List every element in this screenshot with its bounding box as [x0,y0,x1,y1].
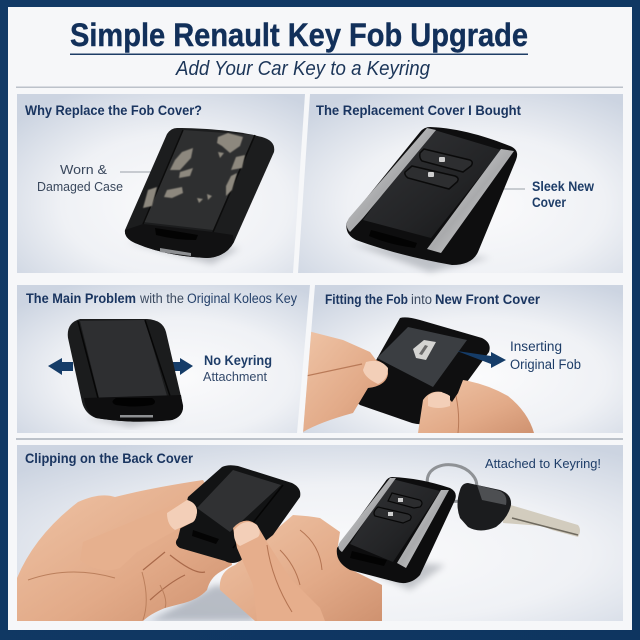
header rule [16,86,623,88]
panel: main problem [17,285,310,433]
icon: right thumb [233,521,325,621]
label: worn and damaged [37,162,123,194]
section rule [16,438,623,440]
heading: why replace: Why Replace the Fob Cover? [25,103,202,118]
label: no keyring: Attachment [203,370,268,384]
button: unlock [405,166,458,189]
icon: left thumb [180,500,197,528]
icon: open cover with fob [355,317,490,424]
label: inserting original fob: Original Fob [510,357,581,372]
icon: original fob [68,319,183,427]
arrow: inserting [457,351,506,368]
label: worn and damaged: Damaged Case [37,179,123,194]
heading: main problem: Original Koleos Key [187,291,297,306]
icon: key ring [424,460,480,506]
icon: car key [458,483,580,537]
title underline [70,54,528,55]
panel: clipping and keyring [17,445,623,621]
shadow under hands [150,585,255,621]
icon: new fob on keyring [337,477,456,590]
icon: worn fob [125,128,274,264]
thumb nail [167,500,197,530]
label: sleek new cover: Sleek New [532,179,594,194]
icon: new fob [346,127,517,272]
heading: fitting the fob [325,292,541,307]
panel: fitting the fob [303,285,623,433]
heading: main problem [26,291,297,306]
label: inserting original fob: Inserting [510,339,562,354]
icon: right hand [418,380,534,433]
label: worn and damaged: Worn & [60,162,107,177]
icon: left hand [17,480,232,621]
heading: fitting the fob: into [411,292,432,307]
label: sleek new cover [532,179,594,210]
heading: fitting the fob: Fitting the Fob [325,292,408,307]
leader line [488,188,525,190]
heading: replacement cover: The Replacement Cover I Bought [316,103,521,118]
label: sleek new cover: Cover [532,195,567,210]
label: no keyring [203,352,272,384]
icon: right fingers behind fob [220,515,382,621]
heading: main problem: with the [139,291,184,306]
button: lock [420,149,472,172]
icon: black back cover [176,465,300,563]
arrow: left [48,358,73,375]
panel: replacement cover [298,94,623,273]
heading: fitting the fob: New Front Cover [435,292,541,307]
label: attached to keyring: Attached to Keyring! [485,456,601,471]
icon: renault logo [413,340,436,360]
subtitle: Add Your Car Key to a Keyring [175,58,430,80]
panel: why replace [17,94,305,273]
leader line [120,171,163,173]
icon: left hand [303,331,388,432]
arrow: right [173,358,193,375]
label: no keyring: No Keyring [204,352,272,368]
title: Simple Renault Key Fob Upgrade [70,17,528,53]
heading: main problem: The Main Problem [26,291,136,306]
label: inserting original fob [510,339,581,372]
heading: clipping on the back cover: Clipping on the Back Cover [25,451,194,466]
